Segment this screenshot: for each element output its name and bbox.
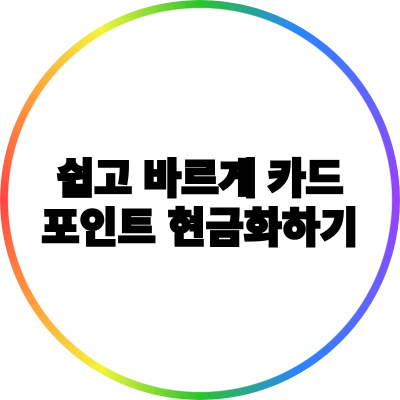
title line 1: 쉽고 바르게 카드 [57, 156, 343, 202]
title line 2: 포인트 현금화하기 [42, 205, 358, 251]
